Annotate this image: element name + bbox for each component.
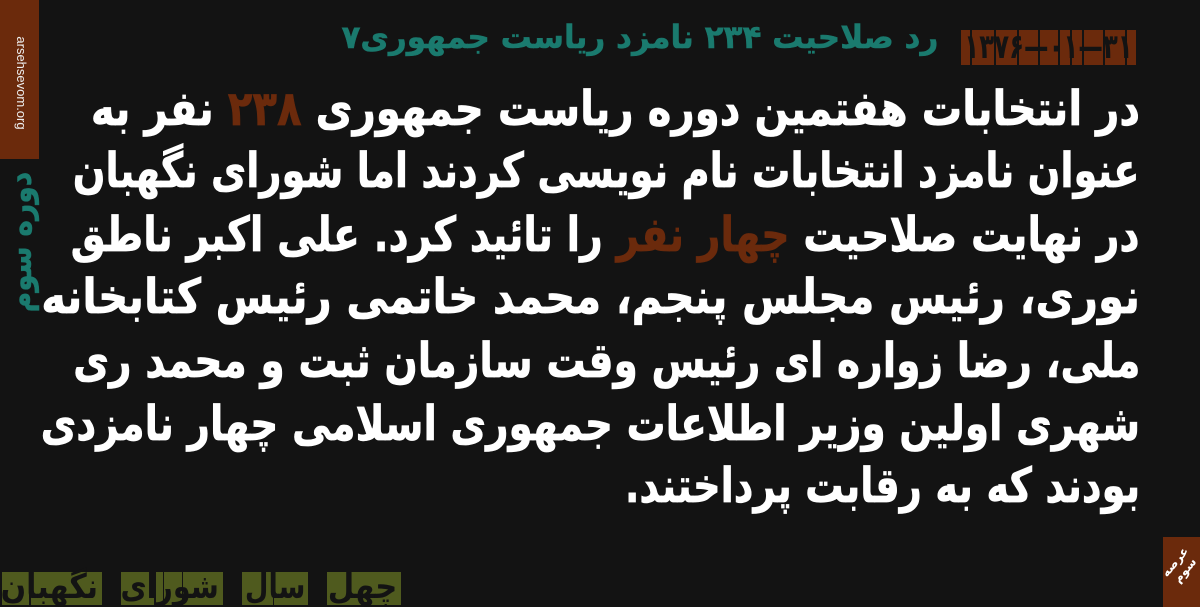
logo calligraphy: عرصه xyxy=(1158,544,1191,580)
line 4: نوری، رئیس مجلس پنجم، محمد خاتمی رئیس کتابخانه xyxy=(41,269,1140,325)
line 2: عنوان نامزد انتخابات نام نویسی کردند اما شورای نگهبان xyxy=(73,143,1140,199)
date cell dividers xyxy=(970,30,1127,65)
tag words: شورای xyxy=(120,567,219,607)
date digits: ۱۳۷۶—۰۱—۳۱ xyxy=(964,27,1133,67)
line 5: ملی، رضا زواره ای رئیس وقت سازمان ثبت و محمد ری xyxy=(73,333,1140,389)
tag words xyxy=(1,567,397,607)
logo calligraphy xyxy=(1158,544,1199,585)
footer tag: forty years of the Guardian Council xyxy=(1,567,401,607)
tag cell backgrounds xyxy=(2,572,401,605)
vertical label: third period: دوره سوم xyxy=(1,172,39,312)
line 1: در انتخابات هفتمین دوره ریاست جمهوری ۲۳۸ نفر به xyxy=(91,81,1140,137)
line 3: در نهایت صلاحیت چهار نفر را تائید کرد. علی اکبر ناطق xyxy=(71,207,1140,263)
site address: arsehsevom.org xyxy=(14,36,29,130)
tag words: سال xyxy=(245,567,305,607)
tag words: نگهبان xyxy=(1,567,98,607)
line 7: بودند که به رقابت پرداختند. xyxy=(625,458,1140,514)
logo calligraphy: سوم xyxy=(1170,555,1199,585)
date stamp xyxy=(961,30,1136,65)
line 6: شهری اولین وزیر اطلاعات جمهوری اسلامی چهار نامزدی xyxy=(40,396,1140,452)
logo tile xyxy=(1163,537,1200,607)
heading: رد صلاحیت ۲۳۴ نامزد ریاست جمهوری۷ xyxy=(341,18,938,56)
tag words: چهل xyxy=(328,567,397,607)
sidebar: site address tab xyxy=(0,0,39,159)
